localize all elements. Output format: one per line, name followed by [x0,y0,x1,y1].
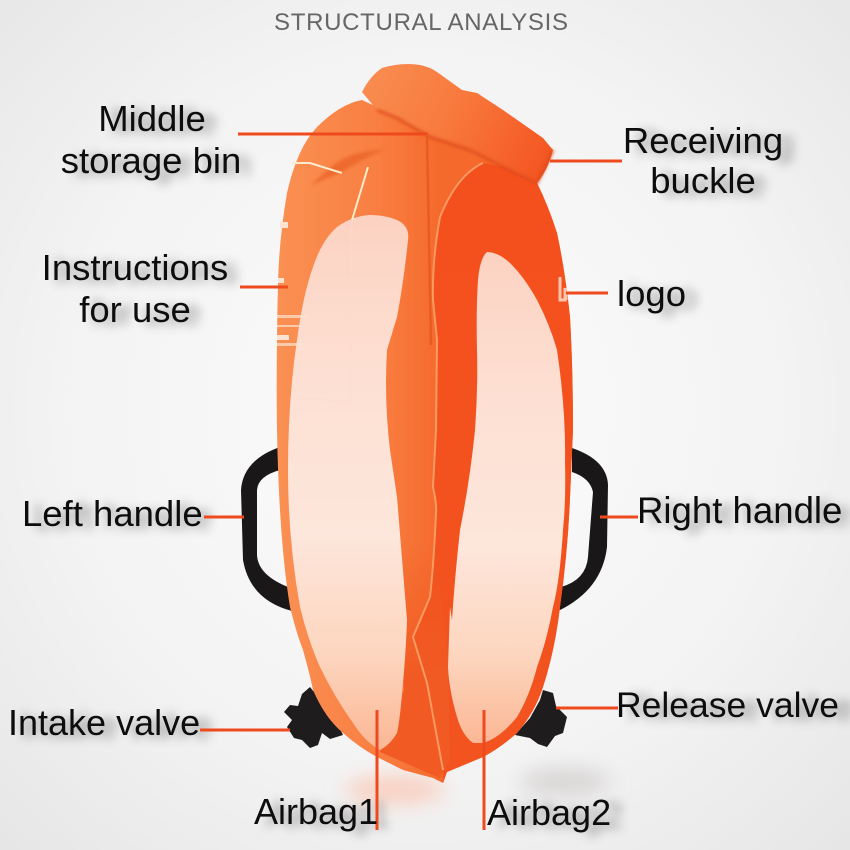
label shadows: storage bin [73,143,251,184]
panel: orange float bag [277,64,573,783]
label shadows: Right handle [649,493,850,534]
airbag 2 window [448,252,565,743]
icon: release valve [515,690,567,747]
callout lines [200,134,638,830]
label: airbag1: Airbag1 [254,791,378,832]
printed instructions [277,222,307,346]
label: intake valve: Intake valve [8,702,200,743]
instructions panel outline [292,163,368,220]
label: left handle: Left handle [22,493,203,534]
label shadows: Receiving [636,123,794,164]
label: airbag2: Airbag2 [487,792,611,833]
right half of bag [413,163,573,783]
label: receiving buckle: buckle [650,160,756,201]
icon: intake valve [284,687,343,748]
label shadows: Airbag1 [266,794,390,835]
label shadows: buckle [662,163,766,204]
label: middle storage bin: storage bin [61,140,241,181]
fold wedge [311,150,385,185]
icon: left handle [241,447,292,611]
instructions panel faint outline [296,220,352,402]
label shadows: Release valve [628,687,850,728]
label: instructions for use: for use [79,289,191,330]
label: receiving buckle: Receiving [623,120,783,161]
roll top [362,64,553,183]
title: STRUCTURAL ANALYSIS [274,9,568,36]
lower centre panel [380,540,450,778]
label: right handle: Right handle [637,490,842,531]
airbag 1 window [288,215,408,750]
label: middle storage bin: Middle [98,98,206,139]
label: logo: logo [617,273,686,314]
label shadows: Intake valve [20,705,212,746]
label shadows: Instructions [54,250,238,291]
label shadows: for use [91,292,201,333]
bag body [277,100,573,783]
icon: right handle [558,448,608,611]
label shadows: Airbag2 [499,795,623,836]
roll fold shadow [377,110,553,183]
label: instructions for use: Instructions [42,247,228,288]
label shadows: Middle [111,101,217,142]
label: release valve: Release valve [616,685,839,725]
label shadows: logo [629,276,697,317]
floor shadow [345,768,610,804]
centre seam [413,163,483,770]
label shadows: Left handle [34,496,212,537]
printed logo [560,277,566,300]
